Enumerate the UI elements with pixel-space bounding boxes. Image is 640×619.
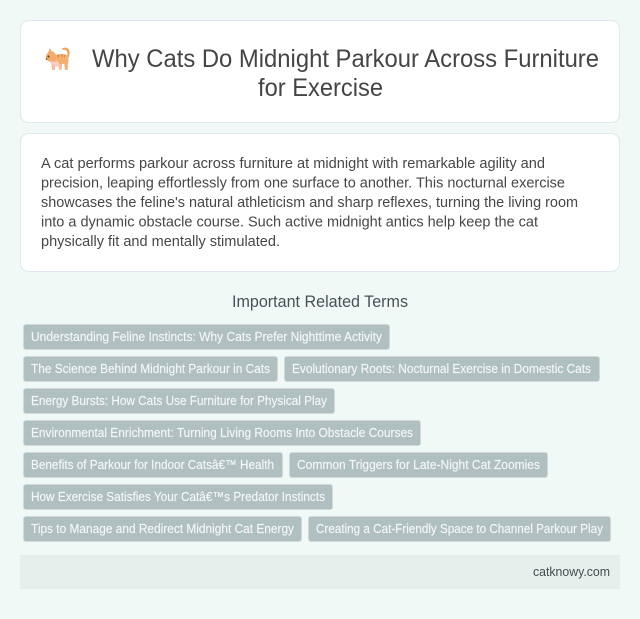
tag: environmental enrichment [24,420,420,446]
tag: triggers [290,452,548,478]
description text: A cat performs parkour across furniture at midnight with remarkable agility and [41,155,545,172]
tag: energy bursts: Energy Bursts: How Cats Use Furniture for Physical Play [31,393,327,408]
description text [41,155,578,250]
tag: predator instincts [24,484,332,510]
title: for Exercise [258,74,383,102]
panel: title card [20,20,620,122]
footer site name: catknowy.com [533,564,610,579]
tag: energy bursts [24,388,334,414]
description text: precision, leaping effortlessly from one surface to another. This nocturnal exercise [41,174,565,192]
title: Why Cats Do Midnight Parkour Across Furniture [92,45,599,73]
footer [20,555,620,589]
tag: feline instincts [24,324,390,350]
title [92,45,599,102]
heading: related terms: Important Related Terms [232,293,408,311]
tag: feline instincts: Understanding Feline Instincts: Why Cats Prefer Nighttime Activity [31,329,382,344]
tag: evolutionary roots [284,356,600,382]
description text: physically fit and mentally stimulated. [41,233,280,250]
panel: description card [20,134,620,272]
tag: benefits: Benefits of Parkour for Indoor Catsâ€™ Health [31,457,274,472]
tag: science: The Science Behind Midnight Parkour in Cats [31,361,270,376]
tag: environmental enrichment: Environmental Enrichment: Turning Living Rooms Into Obstacle Courses [31,425,413,440]
description text: showcases the feline's natural athleticism and sharp reflexes, turning the living room [41,194,578,211]
tag: predator instincts: How Exercise Satisfies Your Catâ€™s Predator Instincts [31,489,325,504]
icon: cat [46,48,70,70]
tag: cat-friendly space [308,516,610,542]
tag: cat-friendly space: Creating a Cat-Friendly Space to Channel Parkour Play [316,521,603,536]
tag list [24,324,610,542]
tag: tips: Tips to Manage and Redirect Midnight Cat Energy [31,521,294,536]
tag: science [24,356,278,382]
tag: evolutionary roots: Evolutionary Roots: Nocturnal Exercise in Domestic Cats [292,361,591,376]
description text: into a dynamic obstacle course. Such active midnight antics help keep the cat [41,214,539,230]
tag: triggers: Common Triggers for Late-Night Cat Zoomies [297,457,540,472]
tag: tips [24,516,302,542]
tag: benefits [24,452,282,478]
